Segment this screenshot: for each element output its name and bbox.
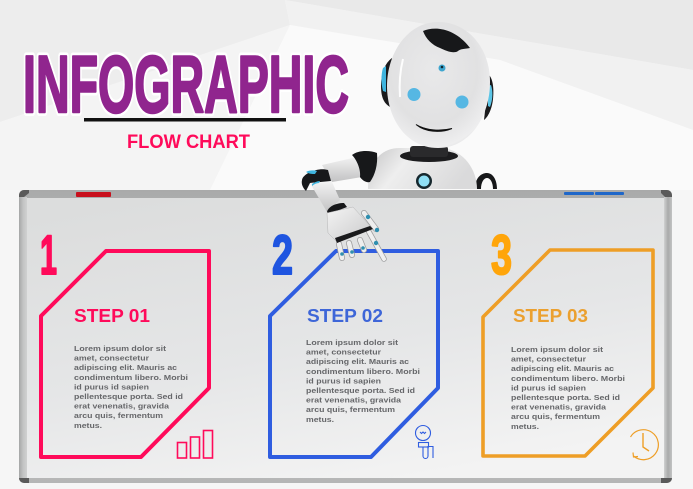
body text 3: erat venenatis, gravida	[511, 403, 607, 412]
body text 2: erat venenatis, gravida	[306, 396, 402, 405]
title: INFOGRAPHIC	[23, 40, 349, 130]
number 3: 3	[491, 223, 512, 286]
body text 1: adipiscing elit. Mauris ac	[74, 363, 177, 372]
body text 1: Lorem ipsum dolor sit	[74, 344, 167, 353]
frame 3	[483, 250, 653, 456]
body text 1: erat venenatis, gravida	[74, 402, 170, 411]
heading 1: STEP 01	[74, 305, 150, 326]
title	[23, 40, 349, 130]
robot smile	[416, 124, 452, 131]
heading 3: STEP 03	[513, 305, 588, 326]
body text 2	[306, 338, 420, 424]
body text 3: arcu quis, fermentum	[511, 412, 600, 421]
heading 2: STEP 02	[307, 305, 383, 326]
robot forehead sensor	[438, 64, 446, 72]
body text 1: pellentesque porta. Sed id	[74, 392, 183, 401]
blue markers	[564, 192, 624, 195]
body text 1: amet, consectetur	[74, 354, 149, 363]
body text 1: condimentum libero. Morbi	[74, 373, 188, 382]
frame 1	[41, 251, 209, 457]
icon: bar chart	[178, 430, 212, 458]
icon: clock	[630, 430, 658, 460]
body text 3: amet, consectetur	[511, 355, 586, 364]
robot left arm	[302, 151, 377, 214]
robot head	[387, 22, 490, 148]
body text 3: id purus id sapien	[511, 383, 586, 392]
body text 1: metus.	[74, 421, 102, 430]
robot neck	[400, 146, 458, 162]
robot hand	[327, 207, 384, 259]
body text 2: id purus id sapien	[306, 376, 381, 385]
whiteboard	[19, 190, 672, 483]
body text 2: Lorem ipsum dolor sit	[306, 338, 399, 347]
body text 2: arcu quis, fermentum	[306, 405, 395, 414]
body text 3: Lorem ipsum dolor sit	[511, 345, 604, 354]
panel: step 2	[270, 223, 438, 459]
robot cheek highlight	[400, 59, 403, 97]
icon: light bulb	[416, 426, 433, 459]
body text 3: metus.	[511, 422, 539, 431]
body text 2: pellentesque porta. Sed id	[306, 386, 415, 395]
frame 2	[270, 251, 438, 457]
panel: step 1	[40, 223, 212, 458]
title underline	[84, 118, 286, 122]
body text 3: pellentesque porta. Sed id	[511, 393, 620, 402]
robot ears	[381, 58, 493, 120]
number 1: 1	[40, 223, 57, 286]
body text 2: amet, consectetur	[306, 348, 381, 357]
body text 2: metus.	[306, 415, 334, 424]
title: INFOGRAPHIC	[23, 40, 349, 130]
body text 2: adipiscing elit. Mauris ac	[306, 357, 409, 366]
robot eyes	[408, 88, 468, 108]
body text 1	[74, 344, 188, 430]
robot chest light	[416, 173, 432, 189]
body text 2: condimentum libero. Morbi	[306, 367, 420, 376]
body text 1: arcu quis, fermentum	[74, 411, 163, 420]
robot	[302, 22, 497, 259]
red marker	[76, 192, 111, 197]
robot torso	[368, 148, 477, 189]
robot head cap	[423, 29, 470, 52]
panel: step 3	[483, 223, 658, 460]
body text 3: adipiscing elit. Mauris ac	[511, 364, 614, 373]
subtitle: FLOW CHART	[127, 132, 250, 153]
robot right rear arm	[475, 173, 497, 189]
body text 3	[511, 345, 625, 431]
number 2: 2	[272, 223, 293, 286]
body text 3: condimentum libero. Morbi	[511, 374, 625, 383]
body text 1: id purus id sapien	[74, 382, 149, 391]
